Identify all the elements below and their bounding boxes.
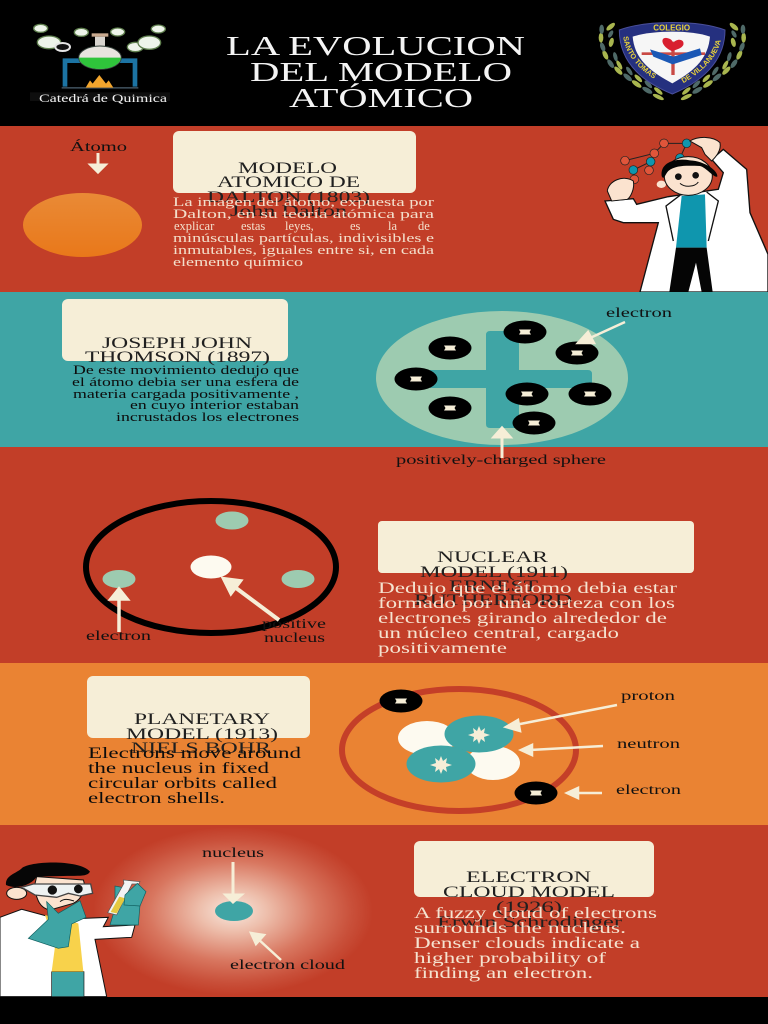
text: Bohr description: Electrons move around: [88, 745, 301, 762]
arrow: proton: [506, 705, 617, 731]
heading box: Bohr: MODEL (1913): [126, 726, 278, 743]
panel: electron cloud: [0, 825, 768, 997]
label: positive nucleus: positive: [262, 617, 326, 632]
logo caption: Catedrá de Quimica: [39, 91, 168, 105]
arrow: electron cloud: [251, 933, 281, 960]
label: proton: proton: [621, 689, 675, 704]
text: Dalton description: leyes,: [285, 219, 314, 233]
panel: Bohr: [0, 663, 768, 825]
label: electron: electron: [86, 629, 151, 644]
panel: Rutherford: [0, 428, 768, 663]
heading box: Rutherford: NUCLEAR: [437, 549, 549, 566]
text: Thomson description: el átomo debia ser una esfera de: [72, 375, 300, 389]
text: Dalton description: estas: [241, 219, 265, 233]
arrow: nucleus: [224, 579, 279, 620]
heading box: Thomson: JOSEPH JOHN: [102, 335, 252, 352]
label: neutron: neutron: [617, 737, 680, 752]
diagram: nuclear atom: [86, 501, 336, 633]
heading box: Dalton: John Dalton: [230, 203, 347, 220]
illustration: scientist with test tube: [0, 862, 146, 997]
label: Átomo: Átomo: [70, 138, 127, 155]
text: Thomson description: [72, 363, 300, 424]
heading box: Dalton: MODELO: [238, 160, 337, 177]
text: cloud description: A fuzzy cloud of electrons: [414, 905, 657, 922]
text: Dalton description: La imagen del átomo, expuesta por: [173, 195, 435, 209]
heading box: Schrodinger: Erwin Schrodinger: [437, 914, 623, 931]
text: Thomson description: materia cargada positivamente ,: [73, 387, 299, 401]
label: positive nucleus: nucleus: [264, 631, 325, 646]
title: LA EVOLUCION: [226, 31, 525, 61]
illustration: scientist with molecule: [605, 137, 768, 292]
heading box: Schrodinger: ELECTRON: [466, 869, 591, 886]
text: Dalton description: Dalton, en su teoría atómica para: [173, 207, 435, 221]
text: Dalton description: explicar: [174, 219, 215, 233]
heading box: Thomson: [62, 299, 288, 366]
text: Dalton description: minúsculas partículas, indivisibles e: [173, 231, 435, 245]
text: Dalton description: inmutables, iguales entre si, en cada: [173, 243, 435, 257]
heading box: Schrodinger: CLOUD MODEL: [443, 884, 615, 901]
heading box: Rutherford: MODEL (1911): [420, 564, 568, 581]
text: Dalton description: [173, 195, 435, 269]
title: [226, 31, 525, 113]
icon: school crest: SANTO TOMAS: [624, 36, 656, 78]
arrow: neutron: [521, 745, 603, 755]
heading box: Thomson: THOMSON (1897): [85, 349, 270, 366]
diagram: electron cloud: [93, 827, 373, 995]
icon: school crest: COLEGIO: [653, 23, 690, 32]
text: Thomson description: De este movimiento dedujo que: [73, 363, 300, 377]
label: nucleus: nucleus: [202, 846, 264, 861]
icon: chemistry logo: [30, 24, 170, 101]
icon: Dalton atom sphere: [23, 193, 142, 257]
label: positively-charged sphere: positively-charged sphere: [396, 453, 606, 468]
icon: school crest: DE VILLANUEVA: [681, 40, 721, 83]
text: Rutherford description: un núcleo central, cargado: [378, 625, 619, 642]
icon: school crest: [598, 22, 746, 100]
text: Thomson description: incrustados los electrones: [116, 410, 299, 424]
text: cloud description: [414, 905, 657, 982]
text: cloud description: finding an electron.: [414, 965, 593, 982]
label: electron: electron: [616, 783, 681, 798]
arrow: nucleus: [226, 862, 241, 902]
label: positive nucleus: [262, 617, 326, 646]
heading box: Rutherford: RUTHERFORD: [414, 592, 572, 609]
header band: [30, 22, 746, 113]
text: Dalton description: es: [350, 219, 361, 233]
title: ATÓMICO: [289, 83, 473, 113]
heading box: Dalton: [173, 131, 416, 220]
diagram: plum pudding atom: [376, 311, 628, 445]
text: Thomson description: en cuyo interior estaban: [130, 398, 300, 412]
label: electron cloud: electron cloud: [230, 958, 345, 973]
text: cloud description: higher probability of: [414, 950, 607, 967]
text: Rutherford description: [378, 580, 678, 657]
text: Rutherford description: electrones girando alrededor de: [378, 610, 667, 627]
footer band: [0, 997, 768, 1024]
heading box: Dalton: DALTON (1803): [207, 189, 370, 206]
heading box: Bohr: PLANETARY: [134, 711, 270, 728]
title: DEL MODELO: [250, 57, 512, 87]
text: Dalton description: elemento químico: [173, 255, 303, 269]
text: Rutherford description: positivamente: [378, 640, 507, 657]
heading box: Rutherford: [378, 521, 694, 609]
heading box: Bohr: NIELS BOHR: [131, 740, 272, 757]
heading box: Dalton: ATOMICO DE: [217, 174, 360, 191]
arrow: electron: [578, 322, 625, 343]
diagram: planetary atom: [342, 689, 576, 811]
text: Dalton description: la: [388, 219, 397, 233]
arrow: positively-charged sphere: [494, 428, 510, 458]
text: Bohr description: circular orbits called: [88, 775, 277, 792]
text: Rutherford description: formado por una corteza con los: [378, 595, 675, 612]
label: electron: electron: [606, 306, 672, 321]
text: cloud description: surrounds the nucleus.: [414, 920, 626, 937]
text: Dalton description: de: [418, 219, 430, 233]
heading box: Rutherford: ERNEST: [449, 578, 539, 595]
panel: Thomson: [0, 292, 768, 447]
text: Bohr description: the nucleus in fixed: [88, 760, 269, 777]
arrow: electron: [111, 589, 127, 632]
arrow: electron: [567, 788, 602, 798]
panel: Dalton: [0, 126, 768, 292]
text: Bohr description: [88, 745, 301, 807]
heading box: Bohr: [87, 676, 310, 757]
text: Rutherford description: Dedujo que el átomo debia estar: [378, 580, 678, 597]
heading box: Schrodinger: [414, 841, 654, 931]
text: cloud description: Denser clouds indicate a: [414, 935, 640, 952]
heading box: Schrodinger: (1926): [496, 899, 562, 916]
text: Bohr description: electron shells.: [88, 790, 225, 807]
arrow: atom: [91, 153, 105, 172]
